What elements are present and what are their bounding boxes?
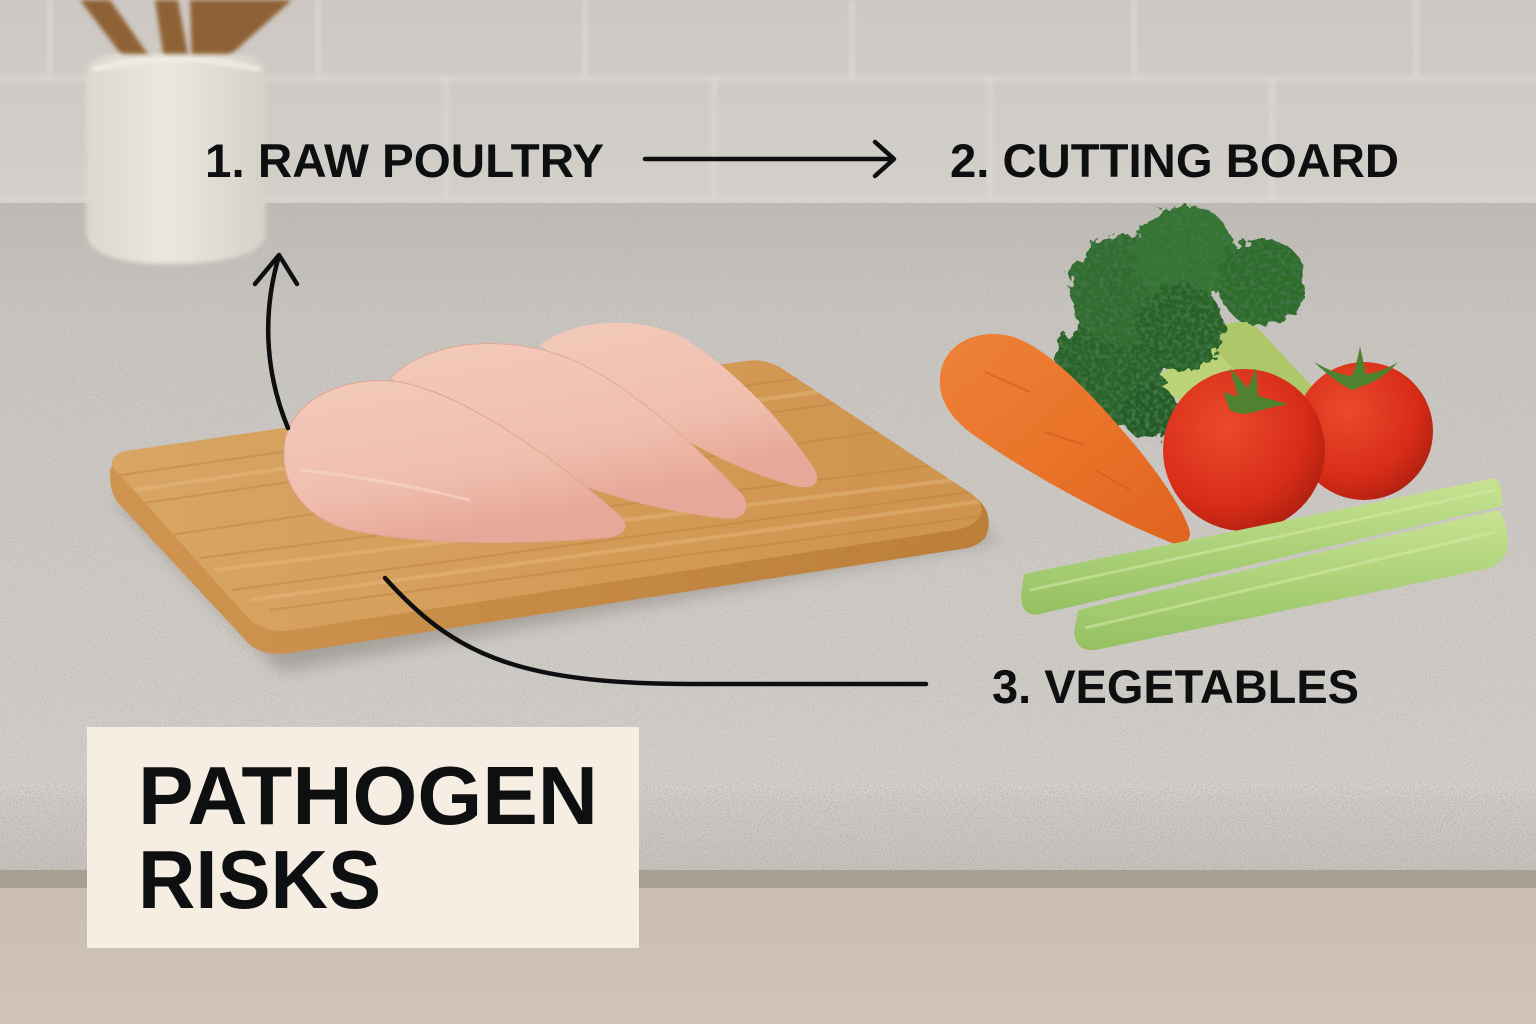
title text: PATHOGEN — [138, 749, 598, 842]
chicken breast: front — [284, 381, 625, 543]
shadow under board — [115, 385, 1000, 672]
chicken breast: middle — [390, 343, 746, 518]
title text: RISKS — [138, 833, 381, 926]
countertop front edge — [0, 783, 1536, 890]
chicken breast: back — [540, 323, 817, 487]
cutting board — [100, 360, 990, 654]
label: step 1 raw poultry: 1. RAW POULTRY — [205, 134, 604, 187]
raw chicken breasts — [284, 323, 817, 543]
countertop — [0, 203, 1536, 793]
title panel — [87, 727, 639, 948]
icon: celery sticks — [1021, 478, 1508, 650]
backsplash wall — [0, 0, 1536, 215]
label: step 2 cutting board: 2. CUTTING BOARD — [950, 134, 1399, 187]
icon: tomato right — [1295, 346, 1433, 500]
icon: utensil crock — [80, 0, 292, 264]
label: step 3 vegetables: 3. VEGETABLES — [992, 660, 1359, 713]
icon: broccoli — [1052, 205, 1320, 440]
cabinet below counter — [0, 888, 1536, 1024]
arrow: vegetables to cutting board — [385, 578, 926, 684]
icon: tomato left — [1163, 368, 1325, 531]
icon: carrot — [940, 334, 1190, 544]
arrow: raw poultry to cutting board — [645, 142, 894, 176]
arrow: chicken up to raw poultry — [255, 255, 297, 428]
